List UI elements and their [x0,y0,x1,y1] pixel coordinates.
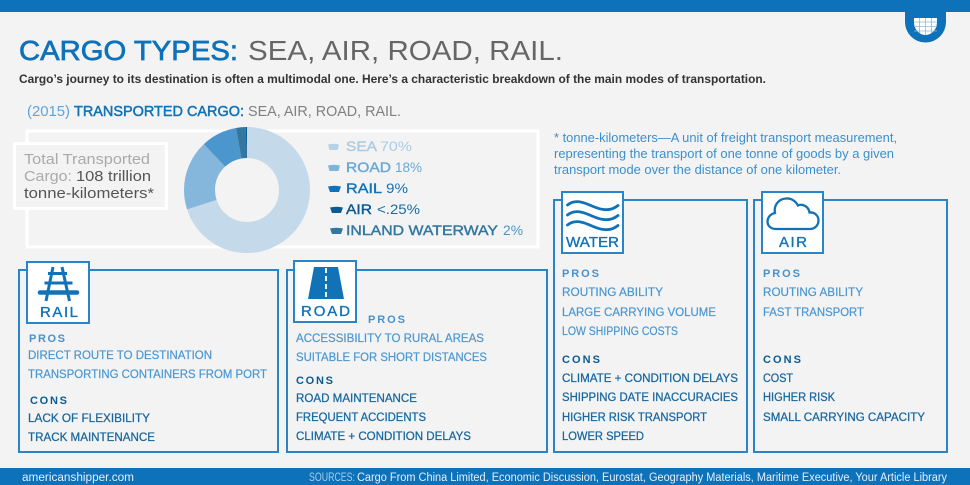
footnote: tonne-kilometers definition: transport mode over the distance of one kilometer. [554,163,841,177]
legend item: inland waterway [330,222,523,238]
legend item: rail: RAIL [346,180,382,196]
panel: rail [19,262,278,452]
rail cons: TRACK MAINTENANCE [28,432,155,444]
legend item: road: 18% [395,159,422,175]
road pros: ACCESSIBILITY TO RURAL AREAS [296,333,484,345]
road cons: CLIMATE + CONDITION DELAYS [296,431,471,443]
legend item: rail [328,180,408,196]
legend item: sea [328,138,412,154]
icon: rail [27,262,89,323]
road pros [296,314,487,364]
water cons: CONS [562,354,600,366]
legend item: inland waterway: INLAND WATERWAY [346,222,499,238]
icon: rail: RAIL [40,304,78,321]
water pros: ROUTING ABILITY [562,287,663,299]
rail pros: PROS [29,333,65,345]
footer: sources: SOURCES: [309,472,355,484]
rail cons: LACK OF FLEXIBILITY [28,413,150,425]
panel: chart frame [27,131,538,247]
water pros: LOW SHIPPING COSTS [562,326,678,338]
rail cons: CONS [30,395,67,407]
water cons [562,354,738,443]
road cons: FREQUENT ACCIDENTS [296,412,426,424]
top bar [0,0,970,12]
air pros: ROUTING ABILITY [763,287,863,299]
water cons: CLIMATE + CONDITION DELAYS [562,373,738,385]
water pros: LARGE CARRYING VOLUME [562,307,716,319]
callout: total transported cargo [14,144,166,208]
icon: road: ROAD [301,303,350,320]
rail cons [28,395,155,444]
icon: water [562,192,623,253]
icon: globe badge [905,12,946,42]
water pros [562,268,716,338]
title: CARGO TYPES: [19,35,238,66]
legend item: road: ROAD [346,159,391,175]
panel: air [754,192,947,452]
footnote: tonne-kilometers definition: * tonne-kilometers—A unit of freight transport measurement, [554,131,897,145]
legend item: rail: 9% [386,180,408,196]
water cons: LOWER SPEED [562,431,644,443]
chart heading [27,103,401,120]
title [19,35,563,66]
air cons: COST [763,373,793,385]
donut chart [200,142,294,238]
legend [328,138,523,238]
air pros: FAST TRANSPORT [763,307,864,319]
legend item: inland waterway: 2% [503,222,523,238]
legend item: sea: 70% [380,138,412,154]
air cons: CONS [763,354,801,366]
callout: total transported cargo: Total Transported [24,152,150,168]
legend item: air [330,201,420,217]
footer: website: americanshipper.com [22,472,134,484]
title: SEA, AIR, ROAD, RAIL. [248,35,563,66]
callout: total transported cargo: 108 trillion [76,169,151,185]
legend item: air: AIR [346,201,372,217]
rail pros: DIRECT ROUTE TO DESTINATION [28,350,212,362]
rail pros: TRANSPORTING CONTAINERS FROM PORT [28,369,267,381]
water cons: SHIPPING DATE INACCURACIES [562,392,738,404]
water pros: PROS [562,268,599,280]
road cons: CONS [296,375,333,387]
subtitle: Cargo’s journey to its destination is often a multimodal one. Here’s a characteristic breakdown of the main modes of transportation. [19,72,766,86]
air cons [763,354,925,424]
air cons: SMALL CARRYING CAPACITY [763,412,925,424]
air pros [763,268,864,319]
chart heading: SEA, AIR, ROAD, RAIL. [248,103,401,120]
panel: road [287,261,547,452]
air pros: PROS [763,268,800,280]
footer: sources: Cargo From China Limited, Economic Discussion, Eurostat, Geography Materials, Maritime Executive, Your Article Library [357,472,947,484]
chart heading: (2015) [27,103,70,120]
icon: air [762,192,823,253]
callout: total transported cargo: tonne-kilometers* [24,186,154,202]
legend item: air: <.25% [377,201,420,217]
icon: road [294,261,356,322]
panel: water [554,192,747,452]
road pros: SUITABLE FOR SHORT DISTANCES [296,352,487,364]
road cons [296,375,471,443]
icon: water: WATER [566,234,619,251]
road pros: PROS [368,314,405,326]
road cons: ROAD MAINTENANCE [296,393,417,405]
footer bar [0,468,970,485]
footnote: tonne-kilometers definition [554,131,897,177]
chart heading: TRANSPORTED CARGO: [74,103,244,120]
legend item: road [328,159,422,175]
legend item: sea: SEA [346,138,378,154]
water cons: HIGHER RISK TRANSPORT [562,412,707,424]
callout: total transported cargo: Cargo: [24,169,72,185]
icon: air: AIR [779,234,807,251]
footnote: tonne-kilometers definition: representing the transport of one tonne of goods by a given [554,147,894,161]
rail pros [28,333,267,381]
air cons: HIGHER RISK [763,392,835,404]
